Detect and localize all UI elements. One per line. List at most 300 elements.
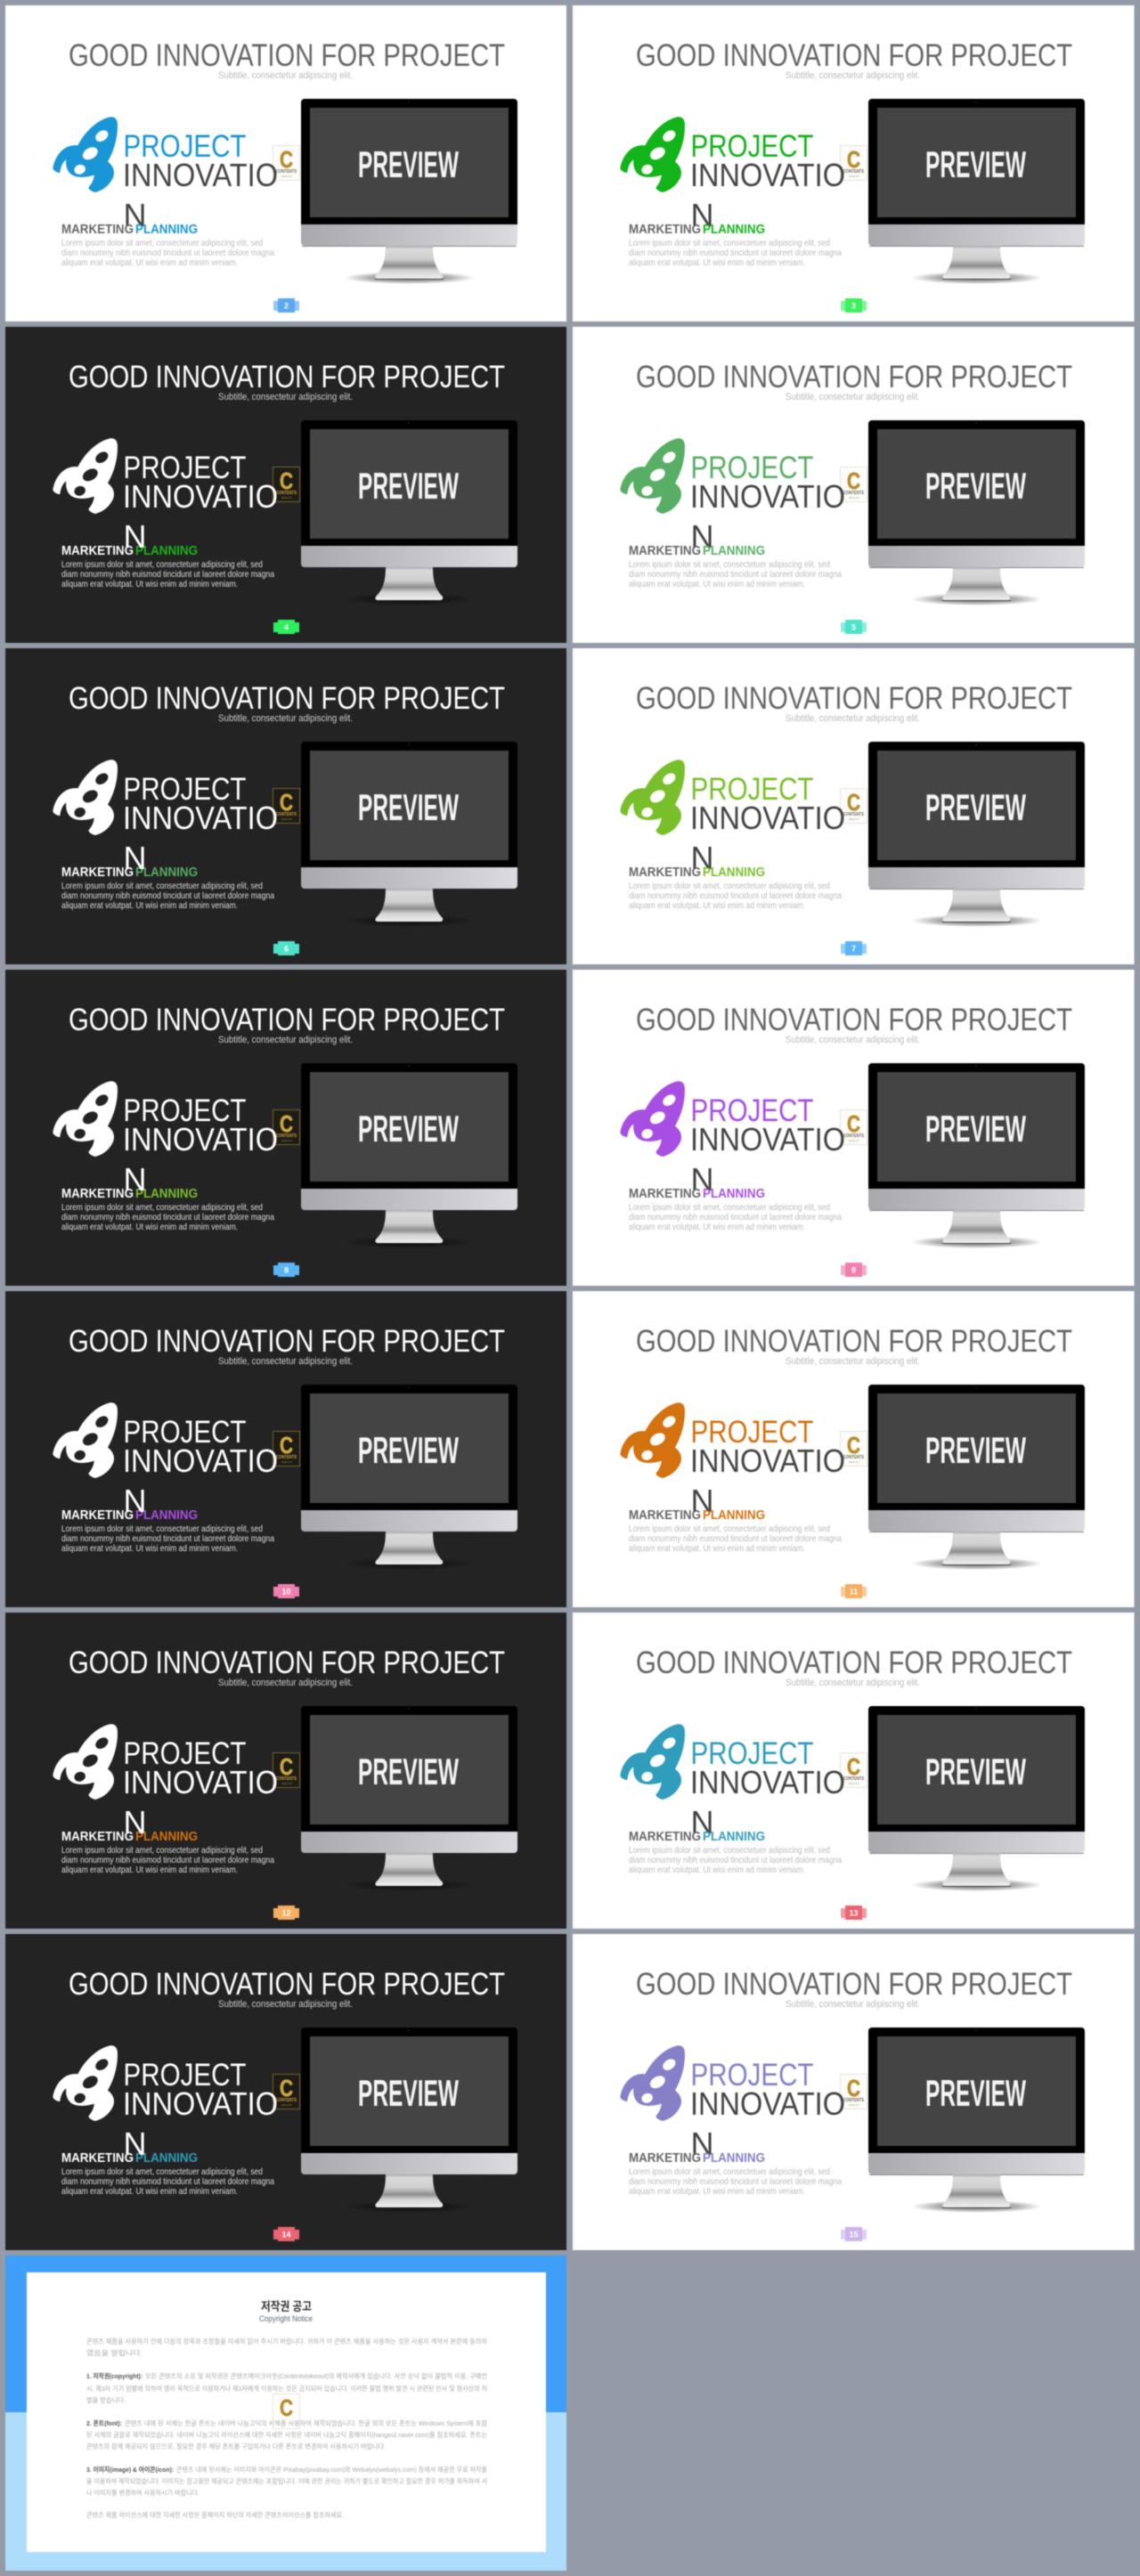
logo text: PROJECT [123, 451, 246, 485]
icon: rocket [53, 760, 118, 835]
body text [629, 1524, 842, 1554]
body text: Lorem ipsum dolor sit amet, consectetuer adipiscing elit, sed [61, 881, 263, 891]
logo text: PROJECT [691, 1736, 814, 1771]
heading: marketing planning: MARKETING [629, 1508, 701, 1523]
contents badge: C [280, 2394, 293, 2421]
contents badge: MAKE OUT [849, 1139, 859, 1142]
slide background [573, 648, 1135, 964]
logo text: INNOVATIO [123, 2085, 278, 2122]
subtitle: Subtitle, consectetur adipiscing elit. [218, 392, 353, 402]
page number badge [841, 1906, 867, 1920]
subtitle: Subtitle, consectetur adipiscing elit. [218, 713, 353, 724]
contents badge: C [847, 2075, 860, 2101]
title: GOOD INNOVATION FOR PROJECT [69, 360, 505, 394]
body text: diam nonummy nibh euismod tincidunt ut laoreet dolore magna [629, 1533, 842, 1544]
icon: rocket [53, 438, 118, 514]
logo text: PLANNING [135, 2151, 198, 2166]
title: GOOD INNOVATION FOR PROJECT [69, 1646, 505, 1680]
heading: marketing planning [629, 1187, 765, 1201]
subtitle: Subtitle, consectetur adipiscing elit. [218, 70, 353, 81]
monitor mockup [301, 99, 517, 284]
logo text: N [691, 518, 714, 555]
contents badge: C [280, 1110, 293, 1137]
contents badge: CONTENTS [276, 1776, 297, 1782]
logo text: INNOVATIO [690, 1764, 845, 1800]
logo text [690, 772, 845, 876]
logo text: PROJECT [691, 451, 814, 485]
contents badge [273, 146, 299, 180]
body text: Lorem ipsum dolor sit amet, consectetuer adipiscing elit, sed [61, 1202, 263, 1213]
page number badge: 3 [851, 301, 856, 310]
logo text: INNOVATIO [690, 2085, 845, 2122]
body text: diam nonummy nibh euismod tincidunt ut laoreet dolore magna [61, 248, 274, 258]
icon: rocket [620, 760, 685, 835]
contents badge: CONTENTS [843, 1455, 865, 1460]
contents badge: C [280, 146, 293, 173]
logo text: N [123, 2125, 146, 2162]
heading: marketing: MARKETING [61, 2151, 134, 2166]
slide background [5, 1613, 566, 1929]
monitor mockup: PREVIEW [925, 1751, 1026, 1792]
body text [629, 559, 842, 589]
monitor mockup [301, 742, 517, 927]
contents badge [841, 1432, 867, 1466]
logo text [123, 2058, 278, 2166]
monitor mockup: PREVIEW [358, 1751, 459, 1792]
contents badge [273, 1109, 299, 1145]
contents badge [273, 1432, 299, 1466]
contents badge [273, 789, 299, 823]
contents badge: C [847, 1432, 860, 1459]
contents badge [841, 1109, 867, 1145]
heading: marketing planning: MARKETING [629, 1187, 701, 1201]
contents badge: CONTENTS [276, 169, 297, 175]
heading: marketing planning: MARKETING [629, 223, 701, 237]
logo text: INNOVATIO [123, 1121, 278, 1158]
logo text: N [691, 1483, 714, 1519]
contents badge: MAKE OUT [849, 1460, 859, 1464]
slide 2: light, blue [5, 5, 566, 321]
monitor mockup: PREVIEW [925, 465, 1026, 507]
logo text: PROJECT [123, 2058, 246, 2092]
logo text: PLANNING [135, 865, 198, 880]
page number badge: 4 [284, 623, 289, 632]
contents badge: C [280, 467, 293, 494]
contents badge [273, 467, 299, 502]
logo text: INNOVATIO [123, 478, 278, 515]
monitor mockup: PREVIEW [925, 143, 1026, 185]
heading: marketing planning: PLANNING [703, 1508, 765, 1523]
heading: marketing planning [61, 223, 198, 237]
page number badge [273, 1906, 299, 1920]
heading: marketing planning: MARKETING [629, 2151, 701, 2166]
contents badge: C [847, 789, 860, 816]
contents badge: MAKE OUT [281, 1139, 292, 1142]
contents badge: CONTENTS [276, 812, 297, 817]
contents badge: MAKE OUT [281, 1782, 292, 1785]
title: GOOD INNOVATION FOR PROJECT [69, 38, 505, 73]
heading: marketing planning: PLANNING [135, 223, 198, 237]
logo text: INNOVATIO [690, 157, 845, 193]
logo text: N [691, 1804, 714, 1841]
body text [629, 2166, 842, 2197]
page number badge: 13 [849, 1909, 859, 1918]
logo text: PROJECT [123, 1415, 246, 1450]
monitor mockup: PREVIEW [358, 2072, 459, 2114]
contents badge: C [280, 2075, 293, 2101]
slide background [5, 648, 566, 964]
body text: aliquam erat volutpat. Ut wisi enim ad minim veniam. [61, 1865, 238, 1875]
icon: rocket [620, 438, 685, 514]
heading: marketing planning [629, 1830, 765, 1844]
slide 11: light, orange [573, 1291, 1135, 1607]
monitor mockup [868, 420, 1085, 605]
contents badge: CONTENTS [843, 169, 865, 175]
contents badge: CONTENTS [276, 491, 297, 496]
body text [629, 238, 842, 268]
contents badge: MAKE OUT [849, 817, 859, 821]
paragraph 2: font: 2. 폰트(font): [86, 2419, 122, 2427]
page number badge [273, 2227, 299, 2241]
paragraph 1: copyright: 시, 제3자 기기 임별에 의하여 영리 목적으로 이용하거나 제3자에게 이용하는 것은 금지되어 있습니다. 이러한 불법 행위 발견 시 관련된 민사 및 형사상의 처 [86, 2384, 487, 2393]
body text: aliquam erat volutpat. Ut wisi enim ad minim veniam. [61, 579, 238, 589]
logo text: PLANNING [135, 1830, 198, 1844]
body text: Lorem ipsum dolor sit amet, consectetuer adipiscing elit, sed [629, 559, 830, 570]
monitor mockup [301, 1706, 517, 1891]
contents badge: CONTENTS [276, 1134, 297, 1139]
contents badge [273, 2393, 299, 2429]
contents badge: C [847, 1110, 860, 1137]
slide 13: light, teal [573, 1613, 1135, 1929]
heading: marketing planning [629, 2151, 765, 2166]
logo text: PLANNING [135, 544, 198, 558]
logo text: PROJECT [691, 2058, 814, 2092]
contents badge [841, 146, 867, 180]
slide background [5, 970, 566, 1286]
logo text: PLANNING [135, 1508, 198, 1523]
contents badge: C [280, 789, 293, 816]
page number badge [273, 620, 299, 634]
intro paragraph: 콘텐츠 제품을 사용하기 전에 다음의 항목과 조항들을 자세히 읽어 주시기 바랍니다. 귀하가 이 콘텐츠 제품을 사용하는 것은 사용자 계약서 본문에 동의하 [86, 2336, 487, 2345]
page number badge: 11 [850, 1587, 858, 1596]
logo text [123, 1415, 278, 1523]
slide background [573, 1291, 1135, 1607]
body text: aliquam erat volutpat. Ut wisi enim ad minim veniam. [61, 2186, 238, 2197]
body text: Lorem ipsum dolor sit amet, consectetuer adipiscing elit, sed [629, 1845, 830, 1856]
subtitle: Subtitle, consectetur adipiscing elit. [786, 392, 920, 402]
body text [61, 2166, 274, 2197]
slide: copyright notice [5, 2255, 566, 2571]
page number badge: 2 [284, 301, 289, 310]
logo text [690, 1093, 845, 1198]
subtitle: Subtitle, consectetur adipiscing elit. [218, 1356, 353, 1367]
body text [629, 881, 842, 911]
intro paragraph [86, 2336, 487, 2357]
body text: diam nonummy nibh euismod tincidunt ut laoreet dolore magna [629, 569, 842, 580]
logo text [690, 1415, 845, 1519]
logo text [690, 1736, 845, 1841]
body text [61, 1524, 274, 1554]
contents badge [841, 789, 867, 823]
slide background [5, 5, 566, 321]
subtitle: Subtitle, consectetur adipiscing elit. [786, 70, 920, 81]
heading: marketing planning: PLANNING [703, 2151, 765, 2166]
slide 8: dark, lime [5, 970, 566, 1286]
page number badge [841, 2227, 867, 2241]
contents badge: C [847, 1753, 860, 1780]
slide 5: light, soft green [573, 327, 1135, 643]
subtitle: Subtitle, consectetur adipiscing elit. [786, 1356, 920, 1367]
logo text [690, 2058, 845, 2162]
subtitle: Subtitle, consectetur adipiscing elit. [218, 1678, 353, 1688]
subtitle: Subtitle, consectetur adipiscing elit. [218, 1035, 353, 1045]
slide background [5, 1291, 566, 1607]
page number badge: 10 [281, 1587, 291, 1596]
body text: Lorem ipsum dolor sit amet, consectetuer adipiscing elit, sed [61, 238, 263, 248]
contents badge: CONTENTS [276, 2098, 297, 2103]
logo text: PROJECT [691, 129, 814, 164]
body text: aliquam erat volutpat. Ut wisi enim ad minim veniam. [629, 900, 805, 911]
paragraph 3: image and icon: 3. 이미지(image) & 아이콘(icon): [86, 2465, 174, 2474]
monitor mockup [301, 420, 517, 605]
page number badge [273, 1263, 299, 1277]
logo text: N [123, 518, 146, 555]
body text: diam nonummy nibh euismod tincidunt ut laoreet dolore magna [61, 1855, 274, 1865]
logo text: INNOVATIO [123, 157, 278, 193]
monitor mockup [868, 1706, 1085, 1891]
icon: rocket [620, 1402, 685, 1478]
logo text [123, 772, 278, 880]
icon: rocket [53, 117, 118, 192]
body text: aliquam erat volutpat. Ut wisi enim ad minim veniam. [61, 1543, 238, 1554]
body text: diam nonummy nibh euismod tincidunt ut laoreet dolore magna [629, 1855, 842, 1865]
icon: rocket [620, 1081, 685, 1157]
subtitle: Subtitle, consectetur adipiscing elit. [786, 1999, 920, 2010]
page number badge: 7 [851, 944, 856, 953]
page number badge: 6 [284, 944, 289, 953]
contents badge: MAKE OUT [849, 496, 859, 500]
slide 6: dark, soft green [5, 648, 566, 964]
heading: marketing: MARKETING [61, 1187, 134, 1201]
icon: rocket [620, 1724, 685, 1800]
body text: diam nonummy nibh euismod tincidunt ut laoreet dolore magna [629, 2176, 842, 2187]
monitor mockup: PREVIEW [925, 1429, 1026, 1471]
slide background [573, 1613, 1135, 1929]
logo text: N [691, 2125, 714, 2162]
logo text: INNOVATIO [690, 1121, 845, 1158]
body text: aliquam erat volutpat. Ut wisi enim ad minim veniam. [61, 1222, 238, 1232]
heading: marketing: MARKETING [61, 544, 134, 558]
heading: marketing planning [629, 223, 765, 237]
subtitle: Subtitle, consectetur adipiscing elit. [218, 1999, 353, 2010]
slide 14: dark, teal [5, 1934, 566, 2250]
slide background [5, 327, 566, 643]
monitor mockup: PREVIEW [358, 465, 459, 507]
title: GOOD INNOVATION FOR PROJECT [69, 1967, 505, 2002]
body text [61, 238, 274, 268]
page number badge [273, 298, 299, 313]
page number badge [273, 941, 299, 955]
body text: diam nonummy nibh euismod tincidunt ut laoreet dolore magna [61, 890, 274, 901]
logo text: PROJECT [123, 1736, 246, 1771]
logo text: INNOVATIO [690, 478, 845, 515]
heading: marketing planning: MARKETING [629, 544, 701, 558]
logo text: PROJECT [123, 129, 246, 164]
body text: diam nonummy nibh euismod tincidunt ut laoreet dolore magna [629, 248, 842, 258]
page number badge [841, 1584, 867, 1598]
icon: rocket [620, 2045, 685, 2121]
paragraph 3: image and icon [86, 2465, 487, 2497]
heading: marketing planning: PLANNING [703, 544, 765, 558]
paragraph 1: copyright: 모든 콘텐츠의 소유 및 저작권은 콘텐츠메이크아웃(Contentstokeout)의 제작사에게 있습니다. 사전 승낙 없이 불법적 이용, 구매전 [145, 2371, 487, 2380]
logo text: INNOVATIO [123, 800, 278, 836]
icon: rocket [53, 1724, 118, 1800]
contents badge: MAKE OUT [849, 2103, 859, 2107]
page number badge: 15 [849, 2230, 859, 2239]
monitor mockup [868, 1063, 1085, 1248]
body text [61, 559, 274, 589]
contents badge: CONTENTS [843, 1776, 865, 1782]
body text: Lorem ipsum dolor sit amet, consectetuer adipiscing elit, sed [629, 1524, 830, 1534]
page number badge [273, 1584, 299, 1598]
logo text: N [123, 1483, 146, 1519]
slide background [573, 1934, 1135, 2250]
body text: aliquam erat volutpat. Ut wisi enim ad minim veniam. [629, 2186, 805, 2197]
contents badge: C [847, 146, 860, 173]
paragraph 2: font: 된 서체의 글꼴로 제작되었습니다. 네이버 나눔고딕 라이선스에 대한 자세한 사항은 네이버 나눔고딕 홈페이지(hangeul.naver.com)를 참조하세요. 폰트는 [86, 2430, 487, 2439]
logo text: INNOVATIO [123, 1442, 278, 1479]
slide 9: light, purple [573, 970, 1135, 1286]
contents badge: C [280, 1432, 293, 1459]
heading: marketing planning: MARKETING [61, 223, 134, 237]
contents badge: C [280, 1753, 293, 1780]
icon: rocket [53, 1081, 118, 1157]
body text: aliquam erat volutpat. Ut wisi enim ad minim veniam. [629, 1865, 805, 1875]
logo text: PROJECT [691, 1415, 814, 1450]
closing line: 콘텐츠 제품 라이선스에 대한 자세한 사항은 홈페이지 하단의 자세한 콘텐츠라이선스를 참조하세요. [86, 2510, 344, 2519]
logo text: PROJECT [123, 1093, 246, 1128]
subtitle: Subtitle, consectetur adipiscing elit. [786, 1678, 920, 1688]
intro paragraph: 였음을 알립니다. [86, 2348, 142, 2357]
title: GOOD INNOVATION FOR PROJECT [69, 1003, 505, 1037]
two-tone blue background [5, 2255, 566, 2571]
body text: Lorem ipsum dolor sit amet, consectetuer adipiscing elit, sed [61, 2166, 263, 2177]
body text: aliquam erat volutpat. Ut wisi enim ad minim veniam. [61, 257, 238, 268]
body text: aliquam erat volutpat. Ut wisi enim ad minim veniam. [61, 900, 238, 911]
logo text: N [691, 1161, 714, 1198]
logo text [690, 451, 845, 555]
body text: aliquam erat volutpat. Ut wisi enim ad minim veniam. [629, 579, 805, 589]
logo text: N [691, 197, 714, 233]
logo text: PLANNING [135, 1187, 198, 1201]
body text [629, 1845, 842, 1875]
paragraph 1: copyright: 벌을 받습니다. [86, 2395, 126, 2404]
contents badge: CONTENTS [843, 2098, 865, 2103]
icon: rocket [620, 117, 685, 192]
heading: marketing: MARKETING [61, 1830, 134, 1844]
contents badge: MAKE OUT [849, 1782, 859, 1785]
heading: marketing planning: PLANNING [703, 865, 765, 880]
slide background [573, 327, 1135, 643]
page number badge: 12 [281, 1909, 291, 1918]
page number badge: 9 [851, 1266, 856, 1275]
logo text: N [123, 1161, 146, 1198]
contents badge: MAKE OUT [281, 817, 292, 821]
logo text: PROJECT [123, 772, 246, 807]
title: GOOD INNOVATION FOR PROJECT [69, 681, 505, 716]
monitor mockup: PREVIEW [925, 786, 1026, 828]
monitor mockup [868, 2027, 1085, 2213]
heading: marketing planning [629, 865, 765, 880]
slide 4: dark, green [5, 327, 566, 643]
monitor mockup: PREVIEW [925, 2072, 1026, 2114]
monitor mockup [301, 1385, 517, 1570]
white notice card [27, 2272, 546, 2552]
body text: Lorem ipsum dolor sit amet, consectetuer adipiscing elit, sed [61, 559, 263, 570]
paragraph 3: image and icon: 콘텐츠 내에 된서체는 이미지와 아이콘은 Pixabay(pixabay.com)와 Webalys(webalys.com) 등에서 제공한 무료 저작물 [176, 2465, 487, 2474]
title: GOOD INNOVATION FOR PROJECT [69, 1324, 505, 1359]
icon: rocket [53, 1402, 118, 1478]
logo text: INNOVATIO [123, 1764, 278, 1800]
page number badge [841, 941, 867, 955]
body text: aliquam erat volutpat. Ut wisi enim ad minim veniam. [629, 257, 805, 268]
monitor mockup: PREVIEW [358, 1108, 459, 1150]
contents badge [841, 2075, 867, 2109]
monitor mockup: PREVIEW [358, 786, 459, 828]
contents badge [273, 1752, 299, 1788]
paragraph 3: image and icon: 나 이미지를 변경하여 사용하시기 바랍니다. [86, 2488, 200, 2497]
logo text: N [123, 1804, 146, 1841]
slide background [573, 5, 1135, 321]
subtitle: Subtitle, consectetur adipiscing elit. [786, 713, 920, 724]
heading: marketing: MARKETING [61, 865, 134, 880]
body text: diam nonummy nibh euismod tincidunt ut laoreet dolore magna [61, 1212, 274, 1223]
page number badge: 14 [281, 2230, 291, 2239]
monitor mockup [868, 1385, 1085, 1570]
body text [629, 1202, 842, 1232]
contents badge [841, 467, 867, 502]
slide 12: dark, orange [5, 1613, 566, 1929]
subtitle: Subtitle, consectetur adipiscing elit. [786, 1035, 920, 1045]
page number badge [841, 1263, 867, 1277]
slide 15: light, periwinkle [573, 1934, 1135, 2250]
monitor mockup [301, 1063, 517, 1248]
body text: Lorem ipsum dolor sit amet, consectetuer adipiscing elit, sed [629, 881, 830, 891]
logo text: PROJECT [691, 772, 814, 807]
logo text: INNOVATIO [690, 1442, 845, 1479]
body text: Lorem ipsum dolor sit amet, consectetuer adipiscing elit, sed [629, 2166, 830, 2177]
contents badge: CONTENTS [843, 491, 865, 496]
logo text [690, 129, 845, 233]
icon: rocket [53, 2045, 118, 2121]
logo text: INNOVATIO [690, 800, 845, 836]
body text: diam nonummy nibh euismod tincidunt ut laoreet dolore magna [61, 2176, 274, 2187]
heading: marketing planning: MARKETING [629, 1830, 701, 1844]
contents badge [841, 1752, 867, 1788]
body text: diam nonummy nibh euismod tincidunt ut laoreet dolore magna [629, 1212, 842, 1223]
body text: aliquam erat volutpat. Ut wisi enim ad minim veniam. [629, 1543, 805, 1554]
contents badge: MAKE OUT [281, 2103, 292, 2107]
contents badge: C [847, 467, 860, 494]
heading: marketing planning: PLANNING [703, 223, 765, 237]
slide 3: light, green [573, 5, 1135, 321]
page number badge [841, 298, 867, 313]
paragraph 2: font: 콘텐츠 내에 된 서체는 한글 폰트는 네이버 나눔고딕의 서체를 사용하여 제작되었습니다. 한글 외의 모든 폰트는 Windows System에 포함 [125, 2418, 487, 2427]
slide 7: light, lime [573, 648, 1135, 964]
body text [61, 881, 274, 911]
contents badge: MAKE OUT [281, 1460, 292, 1464]
slide background [573, 970, 1135, 1286]
